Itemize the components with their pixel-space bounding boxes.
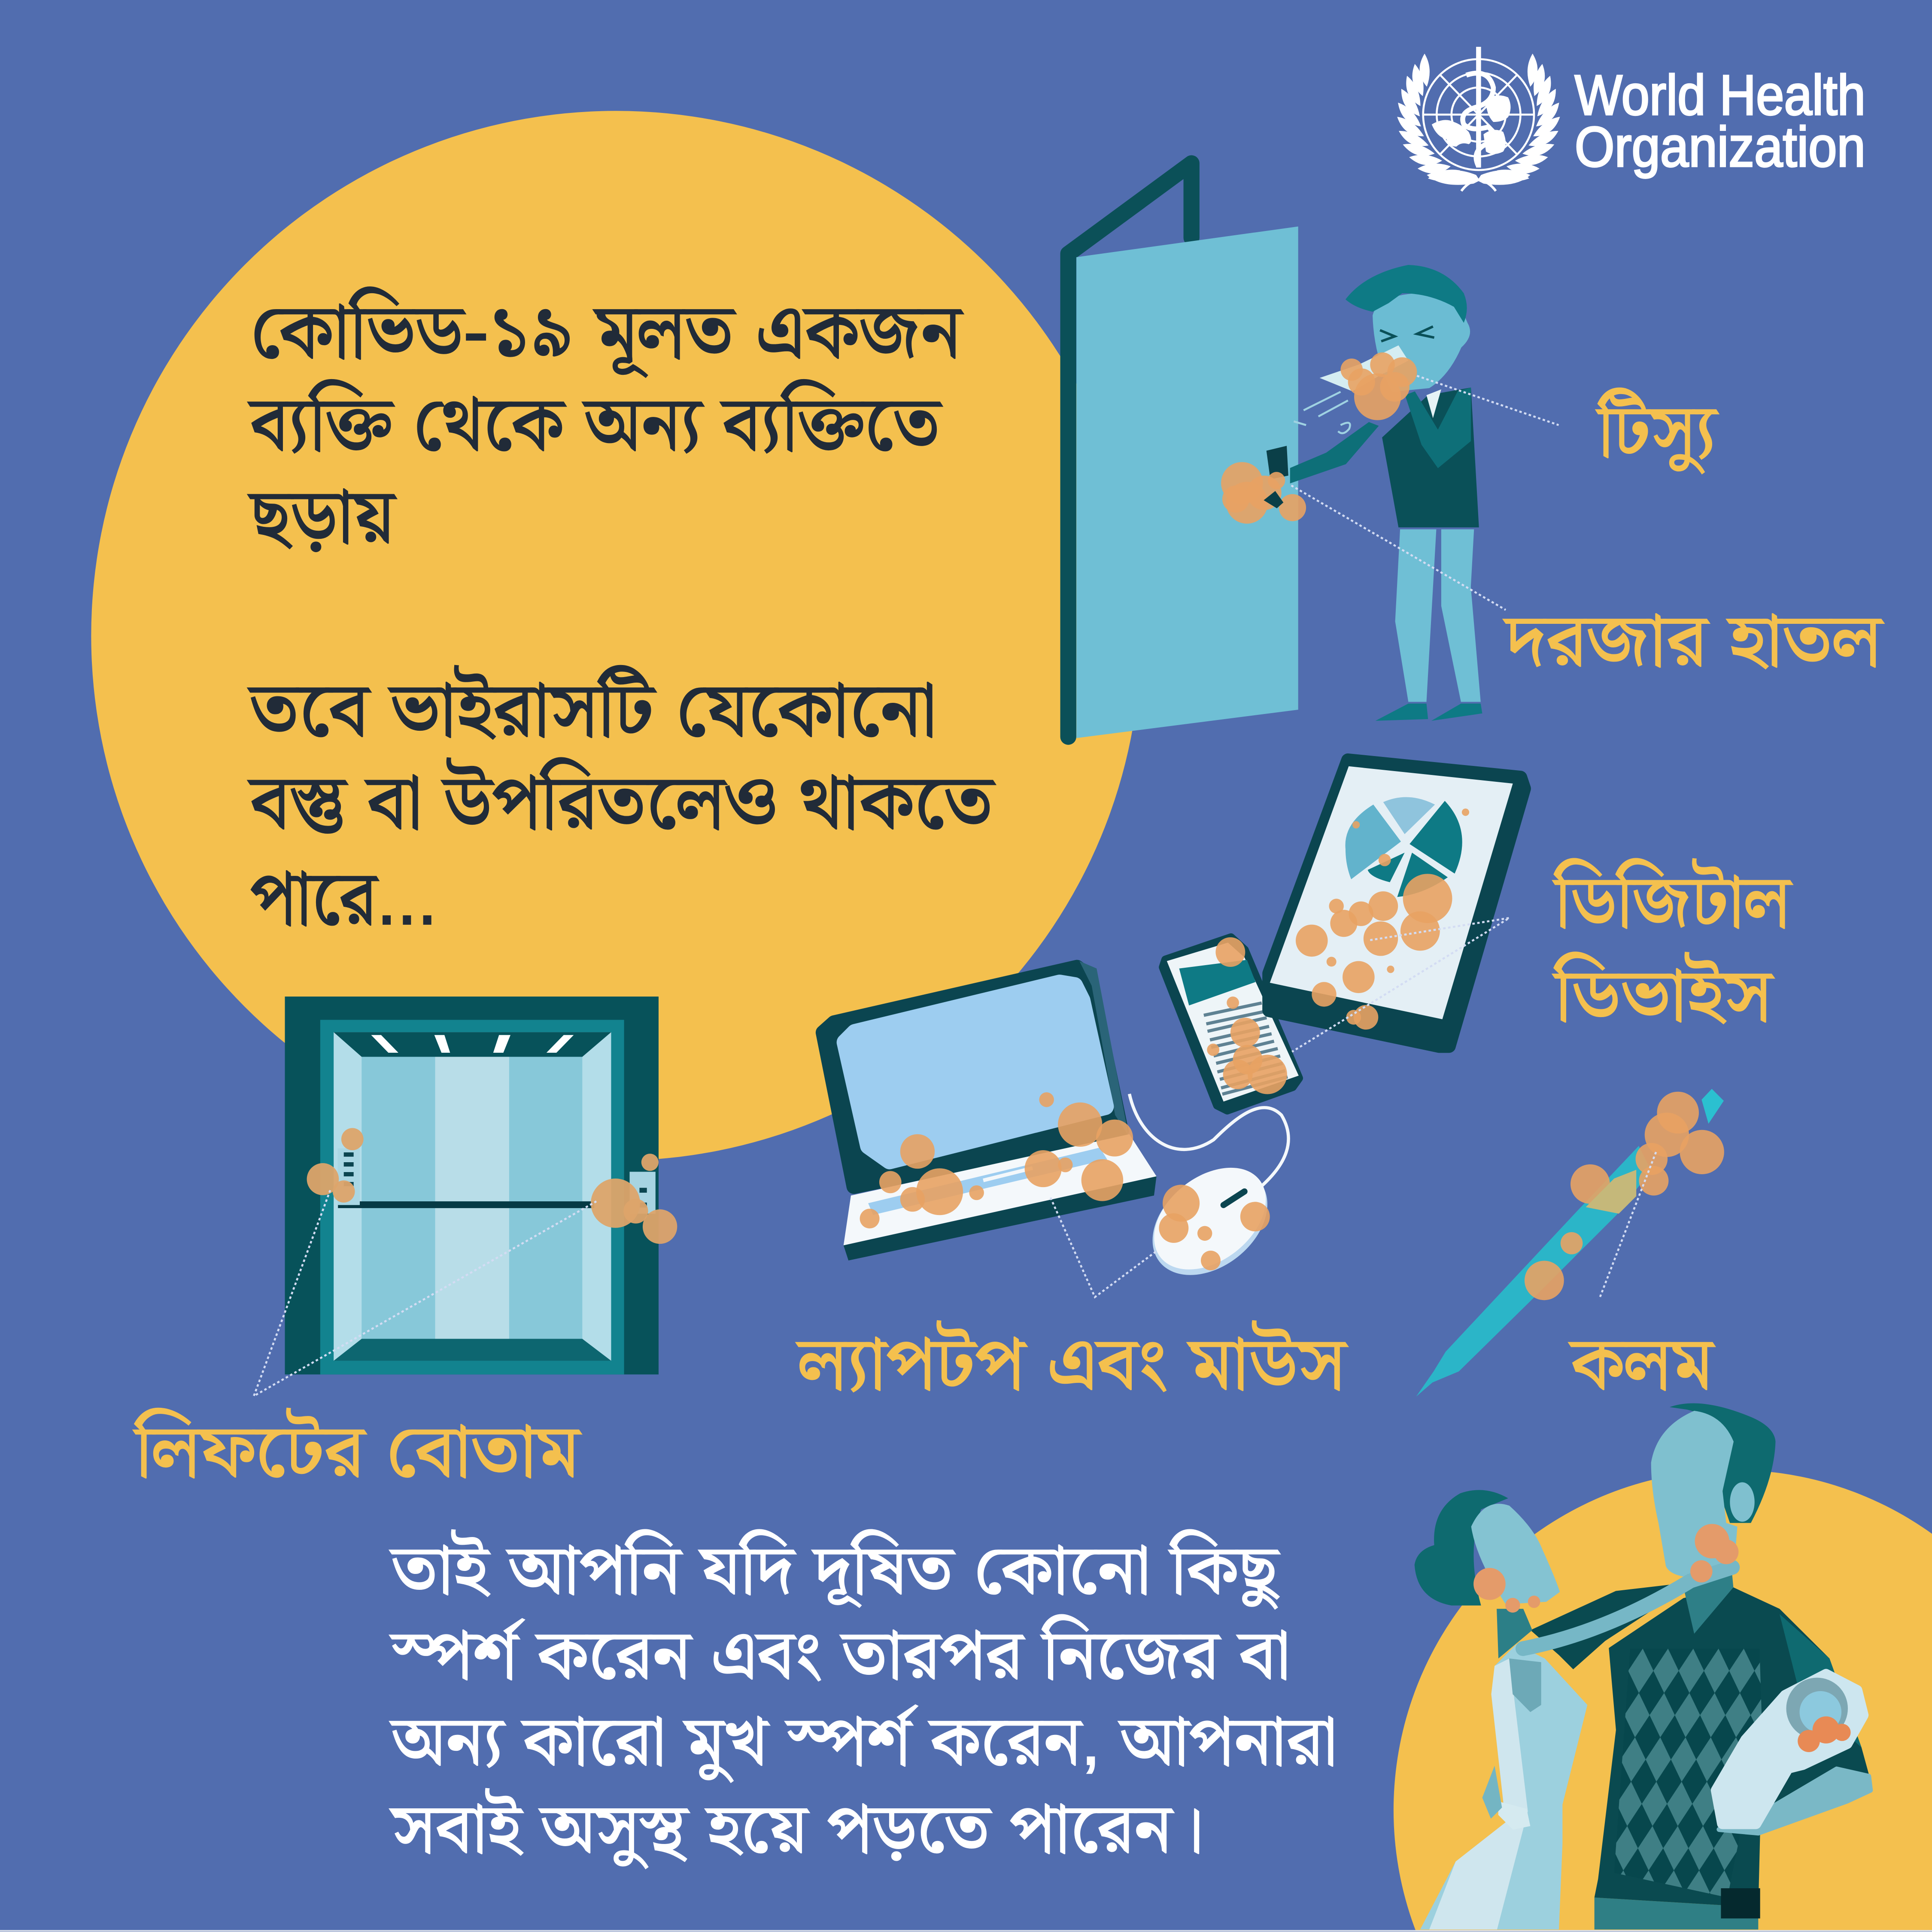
door handle base [1264, 491, 1283, 508]
pointer lines [254, 1190, 596, 1396]
germs on phone [1207, 937, 1287, 1094]
mouse cable [1130, 1094, 1288, 1190]
argyle pattern [1614, 1649, 1762, 1898]
WHO wordmark [1575, 63, 1865, 178]
illustration: pen [1416, 1089, 1724, 1397]
illustration: elevator [254, 996, 677, 1396]
elevator outer frame [285, 996, 659, 1374]
man bent arm [1405, 388, 1471, 468]
man torso [1382, 388, 1479, 527]
man face [1651, 1411, 1738, 1577]
germs on woman's face [1473, 1568, 1540, 1613]
bottom message text: সবাই অসুস্থ হয়ে পড়তে পারেন। [389, 1788, 1205, 1868]
phone screen [1167, 942, 1299, 1102]
door handle [1267, 446, 1288, 479]
man head [1373, 293, 1470, 392]
woman face [1471, 1504, 1560, 1604]
large yellow circle [91, 111, 1141, 1160]
WHO emblem [1397, 47, 1560, 191]
elevator side walls [334, 1032, 611, 1361]
elevator ceiling and lights [334, 1032, 611, 1057]
woman neck [1497, 1609, 1532, 1659]
baby bundle [1716, 1674, 1863, 1823]
germs on man's face [1690, 1524, 1738, 1583]
labels: ডিজিটাল [1553, 858, 1793, 942]
woman chest [1509, 1659, 1541, 1712]
illustration: family [1415, 1403, 1872, 1929]
woman other arm [1482, 1766, 1502, 1819]
labels [133, 388, 1884, 1492]
elevator floor [334, 1339, 611, 1361]
WHO wordmark: World Health [1575, 63, 1865, 127]
man squinting eyes [1380, 327, 1434, 341]
germs on door handle [1221, 462, 1306, 524]
tablet screen [1270, 766, 1513, 1019]
phone text lines [1204, 1003, 1288, 1094]
germs on laptop [860, 1092, 1133, 1228]
illustration: phone [1163, 937, 1299, 1110]
illustration: tablet [1269, 760, 1524, 1052]
sneeze lines [1294, 392, 1350, 433]
main message text: ছড়ায় [248, 473, 396, 559]
phone header [1179, 960, 1255, 1005]
WHO wordmark: Organization [1575, 115, 1865, 178]
man arm sleeve [1531, 1584, 1687, 1669]
laptop lid edge [1079, 961, 1129, 1136]
man extended arm [1290, 422, 1379, 483]
arm under baby [1719, 1769, 1871, 1833]
baby head [1786, 1678, 1851, 1752]
main message text: কোভিড-১৯ মূলত একজন [250, 286, 963, 377]
main message text: পারে... [250, 855, 437, 940]
man sweater [1595, 1587, 1872, 1908]
tablet body [1269, 760, 1524, 1046]
main message text: তবে ভাইরাসটি যেকোনো [247, 665, 936, 752]
door panel [1076, 226, 1298, 738]
phone body [1163, 938, 1299, 1110]
dress light panel [1429, 1659, 1528, 1929]
labels: কলম [1569, 1322, 1715, 1404]
bottom edge strip [0, 1930, 1932, 1932]
bottom message text: স্পর্শ করেন এবং তারপর নিজের বা [389, 1615, 1290, 1693]
man hair [1346, 265, 1467, 323]
pen cap [1701, 1089, 1724, 1124]
man legs and shoes [1376, 529, 1482, 721]
pointer lines [1292, 918, 1510, 1052]
pen body [1416, 1146, 1651, 1397]
bottom message text [389, 1530, 1337, 1868]
man hair [1670, 1403, 1776, 1523]
bottom right yellow circle [1394, 1470, 1932, 1932]
pie chart [1345, 797, 1462, 897]
main message text: ব্যক্তি থেকে অন্য ব্যক্তিতে [248, 380, 943, 466]
bottom message text: অন্য কারো মুখ স্পর্শ করেন, আপনারা [389, 1703, 1337, 1782]
woman hair [1415, 1490, 1508, 1605]
pointer lines [1291, 376, 1558, 610]
pointer line [1600, 1152, 1656, 1297]
labels: লিফটের বোতাম [133, 1408, 581, 1492]
woman arm [1523, 1567, 1732, 1649]
door frame [1068, 163, 1191, 737]
labels: টিস্যু [1596, 388, 1719, 474]
man trousers [1595, 1898, 1758, 1929]
main message text [247, 286, 996, 940]
left button panel [307, 1128, 364, 1205]
labels: ল্যাপটপ এবং মাউস [796, 1321, 1348, 1404]
pointer lines [1051, 1198, 1157, 1297]
tissue [1320, 345, 1408, 391]
laptop base [844, 1134, 1157, 1261]
laptop screen [845, 983, 1105, 1160]
woman dress [1420, 1644, 1587, 1929]
laptop lid [823, 967, 1121, 1187]
man neck [1683, 1568, 1733, 1634]
elevator inner frame [320, 1020, 624, 1374]
elevator back wall panels [361, 1057, 582, 1339]
woman hand at waist [1498, 1801, 1530, 1830]
illustration: laptop and mouse [823, 961, 1288, 1297]
bottom message text: তাই আপনি যদি দূষিত কোনো কিছু [389, 1530, 1280, 1609]
germs on tissue [1340, 352, 1417, 420]
sweater sleeve [1780, 1614, 1862, 1747]
right button panel [591, 1154, 677, 1244]
germs on tablet [1296, 808, 1469, 1030]
labels: দরজার হাতল [1504, 599, 1884, 681]
man collar [1426, 389, 1441, 418]
WHO logo [1397, 47, 1865, 191]
pen tinted section [1586, 1170, 1636, 1214]
main message text: বস্তু বা উপরিতলেও থাকতে [247, 757, 996, 844]
mouse [1132, 1147, 1288, 1297]
labels: ডিভাইস [1552, 952, 1774, 1036]
germs on pen [1525, 1092, 1724, 1300]
illustration: door and sneezing man [1068, 163, 1558, 738]
man ear [1730, 1482, 1755, 1522]
elevator handrail [338, 1201, 594, 1208]
dark square artefact [1721, 1888, 1760, 1918]
